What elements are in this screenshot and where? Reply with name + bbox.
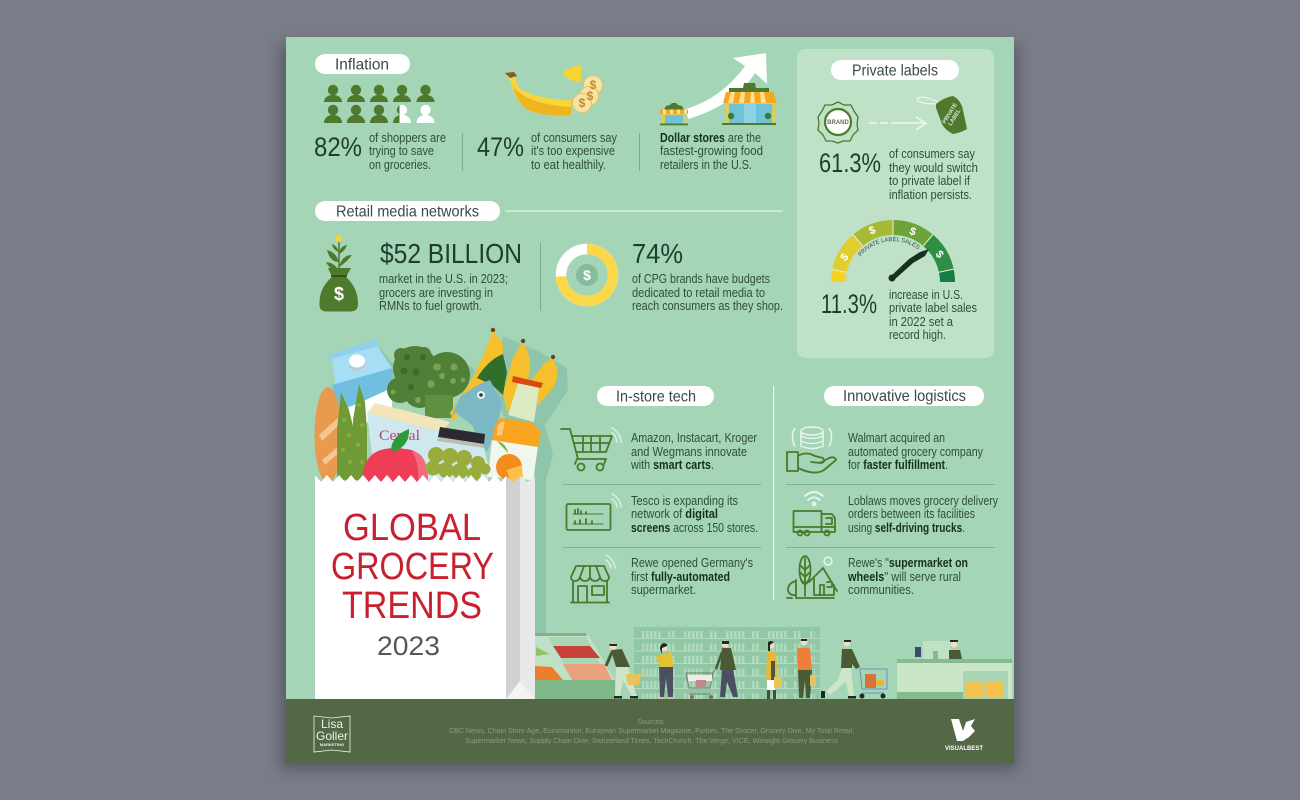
chart: private label sales gauge: $ (838, 251, 851, 264)
icon: rural village (787, 556, 837, 598)
logo: Visualbest: VISUALBEST (945, 745, 983, 752)
chart: private label sales gauge: $ (933, 248, 946, 261)
icon: banana and coins: $ (587, 89, 594, 103)
logo: Lisa Goller Marketing (314, 716, 350, 752)
section: retail media networks (315, 201, 783, 313)
chart: private label sales gauge: $ (908, 225, 918, 239)
text: too expensive: it's too expensive (531, 143, 615, 158)
text: dollar stores: fastest-growing food (660, 143, 763, 158)
milk carton (328, 339, 392, 430)
shelves (634, 626, 820, 699)
text: digital screens (631, 493, 758, 535)
text: digital screens: Tesco is expanding its (631, 493, 738, 508)
text: faster fulfillment: automated grocery company (848, 444, 983, 459)
icon: brand badge (818, 102, 858, 143)
grocery bag (315, 475, 535, 699)
illustration: grocery bag contents (314, 328, 568, 633)
logo: Lisa Goller Marketing: MARKETING (320, 742, 344, 747)
text: CPG budgets (632, 271, 783, 313)
text: shoppers saving (369, 130, 446, 172)
text: digital screens: screens across 150 stores. (631, 520, 758, 535)
text: smart carts: with smart carts. (630, 457, 714, 472)
text: faster fulfillment (848, 430, 983, 472)
heading: Inflation (315, 54, 410, 74)
shopper walking with cart (821, 640, 887, 698)
icon: banana and coins: $ (590, 78, 597, 92)
title (331, 507, 494, 627)
text: too expensive: to eat healthily. (531, 157, 606, 172)
icon: self-driving truck (794, 492, 835, 536)
icon: smart cart (561, 428, 621, 470)
text: self-driving trucks: Loblaws moves grocery delivery (848, 493, 998, 508)
arrow: brand to private label (869, 117, 926, 130)
icon: private label tag: LABEL (948, 108, 963, 127)
heading: Innovative logistics: Innovative logistics (843, 388, 966, 405)
text: supermarket on wheels (847, 555, 968, 597)
icon: private label tag (917, 96, 967, 134)
scene: supermarket (535, 626, 1012, 699)
cart, shopper three (686, 640, 738, 699)
text: sources: Sources: (637, 719, 665, 726)
text: would switch: of consumers say (889, 146, 975, 161)
text: automated supermarket (631, 555, 753, 597)
stat: 74%: 74% (632, 238, 683, 269)
section: innovative logistics (786, 386, 998, 598)
text: too expensive: of consumers say (531, 130, 617, 145)
icon: hand with data (787, 427, 836, 473)
icon: people 82 percent (324, 85, 434, 123)
text: would switch: inflation persists. (889, 187, 972, 202)
shopper with notebook (656, 643, 675, 699)
text: record high: private label sales (889, 300, 977, 315)
icon: money bag with plant: $ (334, 284, 344, 304)
apple (363, 429, 428, 482)
text: dollar stores (660, 130, 763, 172)
text: dollar stores: Dollar stores are the (660, 130, 761, 145)
logo: Lisa Goller Marketing: Goller (316, 729, 348, 743)
infographic panel (286, 37, 1014, 764)
text: digital screens: network of digital (631, 506, 718, 521)
icon: large store (722, 83, 777, 125)
footer (286, 699, 1014, 764)
panel: private labels (797, 49, 994, 358)
stat: 61.3%: 61.3% (819, 148, 881, 178)
text: supermarket on wheels: wheels" will serve rural (847, 569, 961, 584)
zucchini (477, 354, 507, 395)
stat: $52 billion: $52 BILLION (380, 238, 522, 269)
title: GLOBAL (343, 507, 481, 549)
icon: digital screen (566, 494, 621, 530)
bread (314, 387, 342, 483)
text: self-driving trucks: orders between its facilities (848, 506, 975, 521)
text: record high: in 2022 set a (889, 314, 954, 329)
stat: 11.3%: 11.3% (821, 289, 877, 319)
text: would switch: they would switch (889, 160, 978, 175)
background shadow (280, 44, 1018, 770)
heading: Retail media networks: Retail media networks (336, 204, 479, 220)
stat: 47%: 47% (477, 132, 524, 162)
cereal box: Cereal (379, 428, 420, 444)
produce stand (535, 633, 615, 699)
stat: 82%: 82% (314, 132, 362, 162)
title: TRENDS (342, 585, 482, 627)
shopper in yellow coat (766, 641, 782, 699)
text: shoppers saving: of shoppers are (369, 130, 446, 145)
logo: Lisa Goller Marketing: Lisa (321, 717, 343, 731)
text: CPG budgets: of CPG brands have budgets (632, 271, 770, 286)
shopper in orange (797, 638, 816, 698)
year: 2023 (377, 631, 440, 661)
grapes (426, 447, 490, 481)
text: CPG budgets: dedicated to retail media to (632, 285, 765, 300)
text: record high: increase in U.S. (889, 287, 963, 302)
text: market description: market in the U.S. in 2023; (379, 271, 508, 286)
text: would switch (889, 146, 978, 202)
text: market description: RMNs to fuel growth. (379, 298, 482, 313)
icon: automated store (571, 555, 615, 602)
text: self-driving trucks (848, 493, 998, 535)
chart: donut 74 percent (561, 249, 613, 301)
arrow: growth (686, 53, 767, 119)
text: would switch: to private label if (889, 173, 970, 188)
text: CPG budgets: reach consumers as they shop. (632, 298, 783, 313)
cereal box (367, 403, 488, 482)
text: faster fulfillment: for faster fulfillment. (848, 457, 948, 472)
text: automated supermarket: first fully-automated (631, 569, 730, 584)
text: automated supermarket: supermarket. (631, 582, 696, 597)
text: self-driving trucks: using self-driving trucks. (848, 520, 965, 535)
icon: brand badge: BRAND (827, 120, 849, 126)
icon: money bag with plant (319, 235, 358, 312)
text: shoppers saving: trying to save (369, 143, 434, 158)
heading: Inflation: Inflation (335, 56, 389, 74)
chart: private label sales gauge: $ (867, 224, 877, 238)
text: market description: grocers are investing in (379, 285, 493, 300)
heading: In-store tech (597, 386, 714, 406)
shopper with basket (606, 644, 641, 698)
heading: Private labels: Private labels (852, 62, 938, 80)
text: supermarket on wheels: communities. (848, 582, 914, 597)
heading: In-store tech: In-store tech (616, 388, 696, 406)
bananas (450, 328, 557, 422)
section: inflation (314, 53, 777, 172)
title: GROCERY (331, 546, 494, 588)
text: sources (449, 719, 854, 745)
text: sources: CBC News, Chain Store Age, Euromonitor, European Supermarket Magazine, Forbes, The Grocer, Grocery Dive, My Total Retail, (449, 728, 854, 735)
icon: private label tag: PRIVATE (942, 102, 959, 125)
checkout counter (897, 640, 1012, 699)
juice bottle (488, 376, 543, 482)
text: too expensive (531, 130, 617, 172)
chart: donut 74 percent: $ (583, 267, 591, 283)
icon: small store (660, 103, 688, 125)
fish (448, 380, 502, 452)
text: smart carts: and Wegmans innovate (631, 444, 747, 459)
text: record high: record high. (889, 327, 946, 342)
asparagus (337, 384, 367, 480)
text: faster fulfillment: Walmart acquired an (848, 430, 945, 445)
text: dollar stores: retailers in the U.S. (660, 157, 752, 172)
text: supermarket on wheels: Rewe's "supermarket on (848, 555, 968, 570)
icon: banana and coins (505, 65, 602, 115)
text: smart carts: Amazon, Instacart, Kroger (631, 430, 758, 445)
chart: private label sales gauge: PRIVATE LABEL SALES (858, 236, 920, 256)
text: sources: Supermarket News, Supply Chain Dive, Switzerland Times, TechCrunch, The Verge, VICE, Winsight Grocery Business (465, 738, 838, 745)
chart: private label sales gauge (831, 220, 955, 282)
icon: banana and coins: $ (579, 96, 586, 110)
shelf label on box (428, 427, 488, 465)
text: smart carts (630, 430, 758, 472)
text: market description (379, 271, 508, 313)
heading: Private labels (831, 60, 959, 80)
section: in-store tech (561, 386, 761, 602)
text: automated supermarket: Rewe opened Germany's (631, 555, 753, 570)
text: record high (889, 287, 977, 342)
text: shoppers saving: on groceries. (369, 157, 431, 172)
broccoli (387, 346, 470, 418)
logo: Visualbest (945, 719, 983, 752)
